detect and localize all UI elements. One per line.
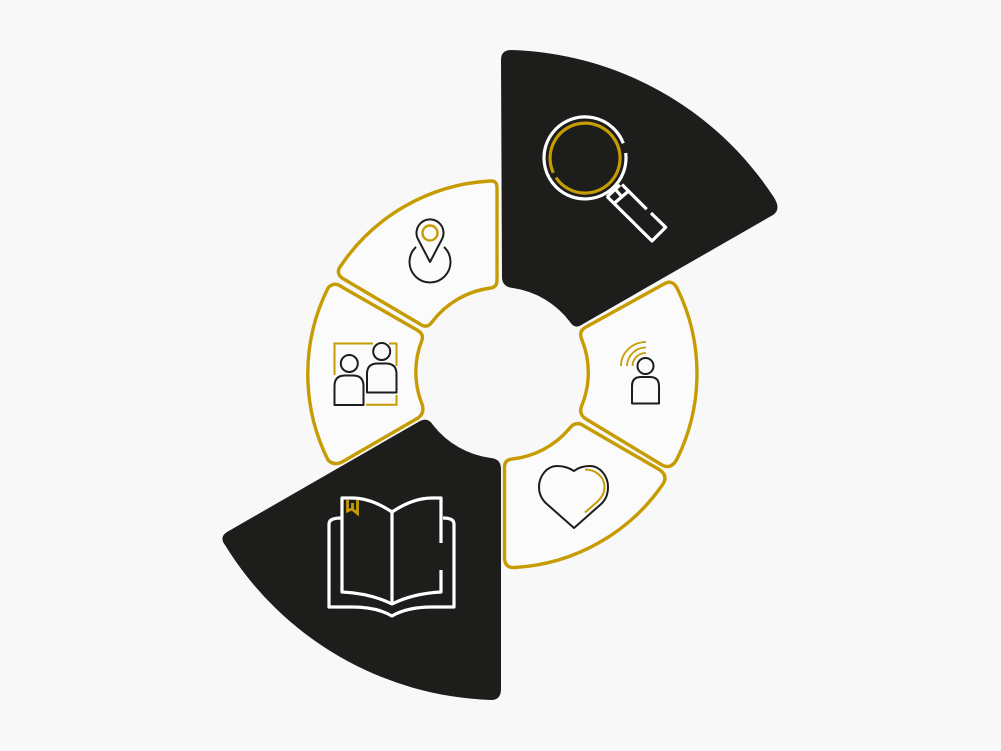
- panel: dark book segment: [222, 420, 501, 700]
- panel: people segment: [308, 284, 423, 464]
- icon: magnifying glass: [544, 117, 666, 241]
- panel: heart segment: [504, 424, 665, 568]
- icon: two people in frame: [334, 343, 396, 405]
- icon: location pin: [409, 219, 450, 282]
- icon: person with signal: [621, 342, 659, 404]
- panel: location segment: [338, 181, 497, 326]
- panel: dark search segment: [501, 50, 778, 327]
- panel: signal person segment: [581, 282, 697, 467]
- icon: heart: [539, 466, 608, 528]
- icon: open book: [329, 498, 454, 616]
